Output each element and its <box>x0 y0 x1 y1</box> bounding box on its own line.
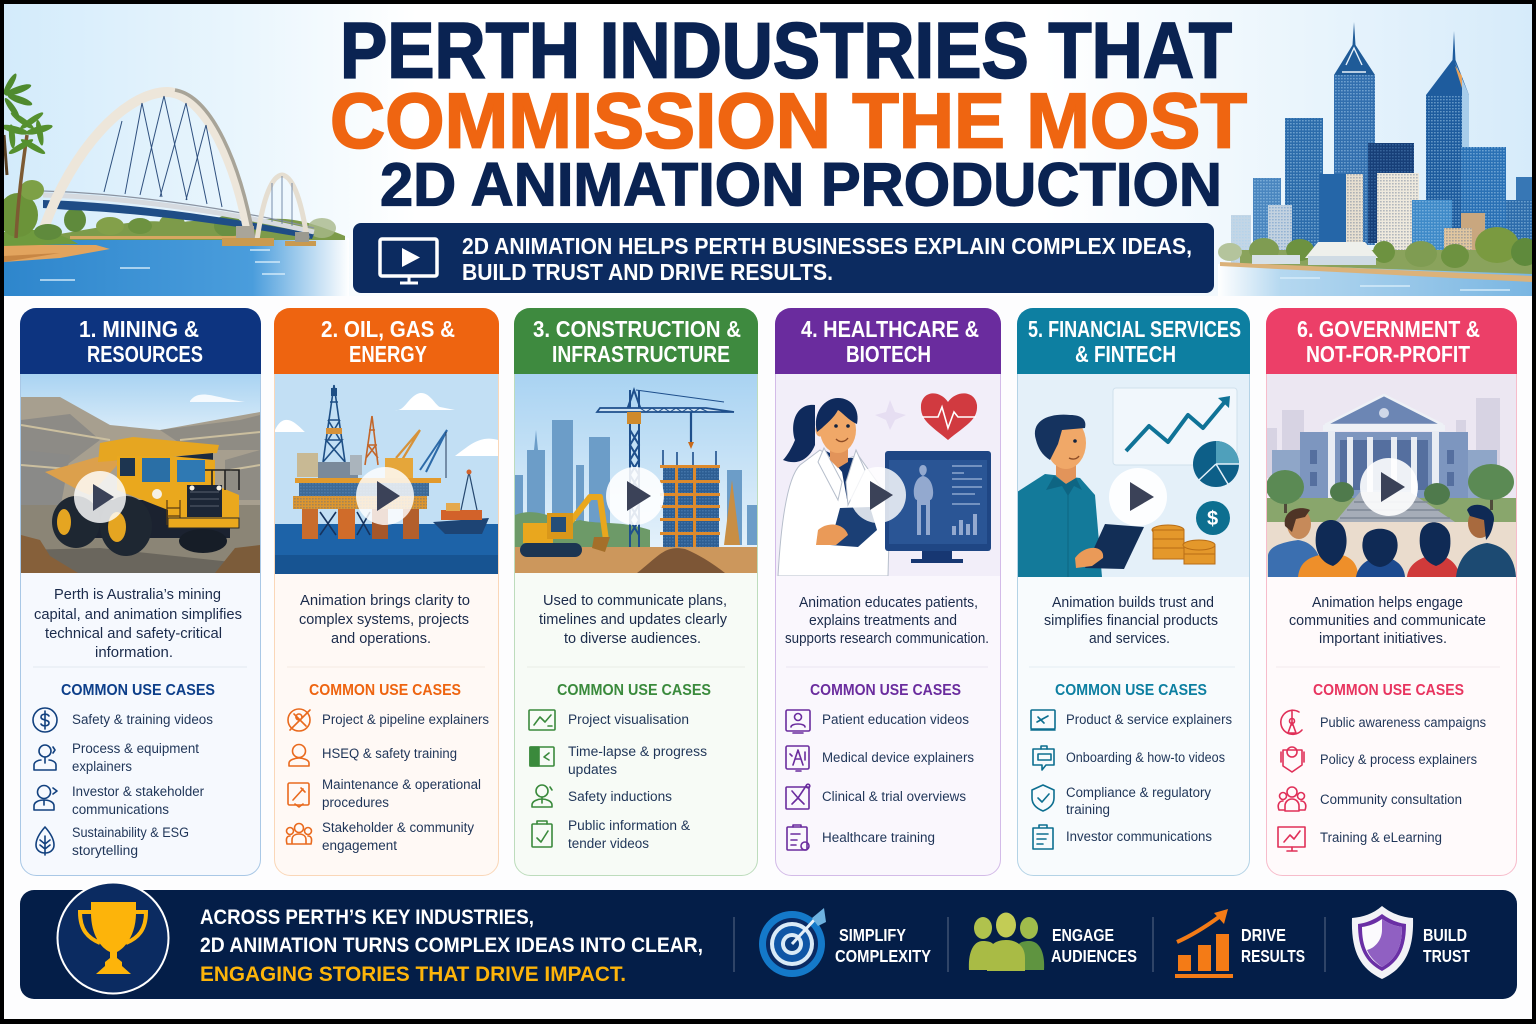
benefit: drive results <box>1175 909 1305 978</box>
heading: common use cases: COMMON USE CASES <box>557 682 711 699</box>
icon: leaf <box>36 827 54 855</box>
panel: mining and resources <box>20 308 261 876</box>
illustration: Perth city skyline <box>1218 22 1536 296</box>
header: mining: 1. MINING & <box>79 316 199 342</box>
title: 2D ANIMATION PRODUCTION <box>380 150 1222 218</box>
benefit: build trust <box>1352 906 1470 979</box>
description: complex systems, projects <box>299 612 469 628</box>
use cases list: Public awareness campaigns <box>1320 715 1486 730</box>
icon: investor document <box>1033 825 1053 849</box>
icon: training checklist <box>787 825 809 850</box>
use cases list: training <box>1066 802 1110 817</box>
header: healthcare: 4. HEALTHCARE & <box>801 316 979 342</box>
use cases list: Product & service explainers <box>1066 712 1232 727</box>
icon: policy <box>1281 747 1304 772</box>
illustration: doctor with monitor <box>776 374 1000 576</box>
icon: community <box>286 824 312 844</box>
icon: coin <box>33 708 57 732</box>
description: information. <box>95 645 173 661</box>
description: important initiatives. <box>1319 631 1447 647</box>
benefit: drive results: DRIVE <box>1241 925 1286 945</box>
benefit: engage audiences: ENGAGE <box>1052 925 1114 945</box>
header: financial services: & FINTECH <box>1075 341 1176 367</box>
description: communities and communicate <box>1289 613 1486 629</box>
icon: training monitor <box>1278 827 1305 851</box>
description: and services. <box>1089 631 1170 647</box>
use cases list <box>286 709 489 853</box>
header: mining: RESOURCES <box>87 341 203 367</box>
icon: document tick <box>532 821 552 847</box>
description <box>299 593 470 647</box>
icon: target <box>759 908 826 977</box>
use cases list: Safety & training videos <box>72 712 213 727</box>
illustration: Perth river bridge <box>0 72 349 296</box>
closing message: 2D ANIMATION TURNS COMPLEX IDEAS INTO CLEAR, <box>200 934 703 957</box>
use cases list: HSEQ & safety training <box>322 746 457 761</box>
icon: process <box>34 745 56 770</box>
palm crown <box>4 112 53 154</box>
icon: safety person <box>532 785 552 807</box>
description: timelines and updates clearly <box>539 612 728 628</box>
panel: oil gas and energy <box>274 308 499 876</box>
illustration: government building and community <box>1266 374 1516 577</box>
header: mining <box>20 308 261 374</box>
benefit: build trust: TRUST <box>1423 946 1470 966</box>
use cases list: Project & pipeline explainers <box>322 712 489 727</box>
benefit: build trust: BUILD <box>1423 925 1467 945</box>
header: oil and gas: 2. OIL, GAS & <box>321 316 455 342</box>
icon: time-lapse panel <box>530 747 554 766</box>
use cases list <box>33 708 213 858</box>
description <box>1044 595 1218 647</box>
use cases list: Maintenance & operational <box>322 777 481 792</box>
use cases list: Patient education videos <box>822 712 969 727</box>
benefit: drive results: RESULTS <box>1241 946 1305 966</box>
use cases list: tender videos <box>568 836 649 851</box>
use cases list <box>1031 710 1232 849</box>
panel: government and not-for-profit <box>1266 308 1517 876</box>
description: Perth is Australia’s mining <box>54 587 221 603</box>
description: supports research communication. <box>785 631 989 647</box>
icon: growth chart <box>1175 909 1233 978</box>
description <box>1289 595 1486 647</box>
use cases list: Community consultation <box>1320 792 1462 807</box>
description <box>539 593 728 647</box>
icon: medical device <box>786 746 809 771</box>
use cases list: engagement <box>322 838 397 853</box>
header: financial services <box>1017 308 1250 374</box>
use cases list: Investor communications <box>1066 829 1212 844</box>
description: and operations. <box>331 631 431 647</box>
use cases list: Investor & stakeholder <box>72 784 204 799</box>
icon: chart screen <box>529 710 555 730</box>
benefit: simplify complexity: COMPLEXITY <box>835 946 931 966</box>
use cases list: procedures <box>322 795 389 810</box>
heading: common use cases: COMMON USE CASES <box>1055 682 1207 699</box>
closing message <box>200 906 703 986</box>
icon: video screen <box>380 239 437 283</box>
use cases list: updates <box>568 762 617 777</box>
use cases list <box>529 710 707 851</box>
use cases list: Stakeholder & community <box>322 820 474 835</box>
description: Used to communicate plans, <box>543 593 727 609</box>
palm crown edge <box>4 74 32 116</box>
illustration: mining truck <box>21 374 260 573</box>
illustration: construction site <box>515 374 757 573</box>
icon: people <box>969 912 1044 971</box>
description: Animation builds trust and <box>1052 595 1214 611</box>
heading: common use cases: COMMON USE CASES <box>309 682 461 699</box>
use cases list <box>1278 710 1486 851</box>
benefit: simplify complexity <box>759 908 931 977</box>
use cases list: Policy & process explainers <box>1320 752 1477 767</box>
use cases list: Compliance & regulatory <box>1066 785 1211 800</box>
title: PERTH INDUSTRIES THAT <box>340 6 1232 94</box>
subtitle banner: 2D ANIMATION HELPS PERTH BUSINESSES EXPLAIN COMPLEX IDEAS, <box>462 233 1192 259</box>
description: Animation brings clarity to <box>300 593 470 609</box>
use cases list: Clinical & trial overviews <box>822 789 966 804</box>
heading: common use cases: COMMON USE CASES <box>61 682 215 699</box>
illustration: offshore platform <box>275 374 498 574</box>
illustration: finance analyst <box>1017 374 1249 577</box>
icon: awareness <box>1281 710 1302 734</box>
header: healthcare: BIOTECH <box>846 341 931 367</box>
description: Animation helps engage <box>1312 595 1463 611</box>
heading: common use cases: COMMON USE CASES <box>810 682 961 699</box>
use cases list: communications <box>72 802 169 817</box>
icon: patient screen <box>786 710 810 733</box>
benefit: simplify complexity: SIMPLIFY <box>839 925 906 945</box>
title: COMMISSION THE MOST <box>330 76 1247 164</box>
closing message: ENGAGING STORIES THAT DRIVE IMPACT. <box>200 963 626 986</box>
use cases list: Process & equipment <box>72 741 199 756</box>
closing message: ACROSS PERTH’S KEY INDUSTRIES, <box>200 906 534 929</box>
use cases list: Medical device explainers <box>822 750 974 765</box>
description: to diverse audiences. <box>564 631 701 647</box>
icon: community <box>1278 787 1306 811</box>
heading: common use cases: COMMON USE CASES <box>1313 682 1464 699</box>
title <box>330 6 1247 218</box>
use cases list: explainers <box>72 759 132 774</box>
subtitle banner: BUILD TRUST AND DRIVE RESULTS. <box>462 259 833 285</box>
illustration: finance analyst: $ <box>1207 508 1218 530</box>
icon: investor <box>34 786 57 810</box>
description: Animation educates patients, <box>799 595 978 611</box>
icon: product screen <box>1031 710 1055 730</box>
icon: onboarding chat <box>1033 746 1054 770</box>
panel: construction and infrastructure <box>514 308 758 876</box>
use cases list: Public information & <box>568 818 690 833</box>
use cases list: Training & eLearning <box>1320 830 1442 845</box>
benefit: engage audiences <box>969 912 1137 971</box>
header: healthcare <box>775 308 1001 374</box>
benefit: engage audiences: AUDIENCES <box>1051 946 1137 966</box>
hero illustration background <box>0 4 1536 296</box>
use cases list: Project visualisation <box>568 712 689 727</box>
subtitle banner <box>353 223 1214 293</box>
header: government: NOT-FOR-PROFIT <box>1306 341 1471 367</box>
use cases list <box>786 710 974 850</box>
use cases list: Sustainability & ESG <box>72 825 189 840</box>
use cases list: Safety inductions <box>568 789 672 804</box>
icon: shield <box>1352 906 1413 979</box>
description <box>34 587 242 661</box>
header: government: 6. GOVERNMENT & <box>1297 316 1480 342</box>
icon: maintenance clipboard <box>288 783 309 807</box>
use cases list: Onboarding & how-to videos <box>1066 750 1225 765</box>
icon: trial clipboard <box>786 784 810 809</box>
description <box>785 595 989 647</box>
header: government <box>1266 308 1517 374</box>
description: simplifies financial products <box>1044 613 1218 629</box>
icon: compliance shield <box>1032 785 1054 811</box>
panel: financial services and fintech <box>1017 308 1250 876</box>
description: explains treatments and <box>809 613 957 629</box>
use cases list: storytelling <box>72 843 138 858</box>
header: construction: 3. CONSTRUCTION & <box>533 316 741 342</box>
icon: pipeline <box>288 709 310 731</box>
description: capital, and animation simplifies <box>34 607 242 623</box>
panel: healthcare and biotech <box>775 308 1001 876</box>
header: construction: INFRASTRUCTURE <box>552 341 730 367</box>
icon: safety person <box>289 744 309 766</box>
header: oil and gas: ENERGY <box>349 341 427 367</box>
use cases list: Time-lapse & progress <box>568 744 707 759</box>
use cases list: Healthcare training <box>822 830 935 845</box>
header: oil and gas <box>274 308 499 374</box>
description: technical and safety-critical <box>45 626 222 642</box>
footer banner <box>20 882 1517 999</box>
icon: trophy <box>58 882 168 994</box>
header: financial services: 5. FINANCIAL SERVICES <box>1028 316 1241 342</box>
header: construction <box>514 308 758 374</box>
